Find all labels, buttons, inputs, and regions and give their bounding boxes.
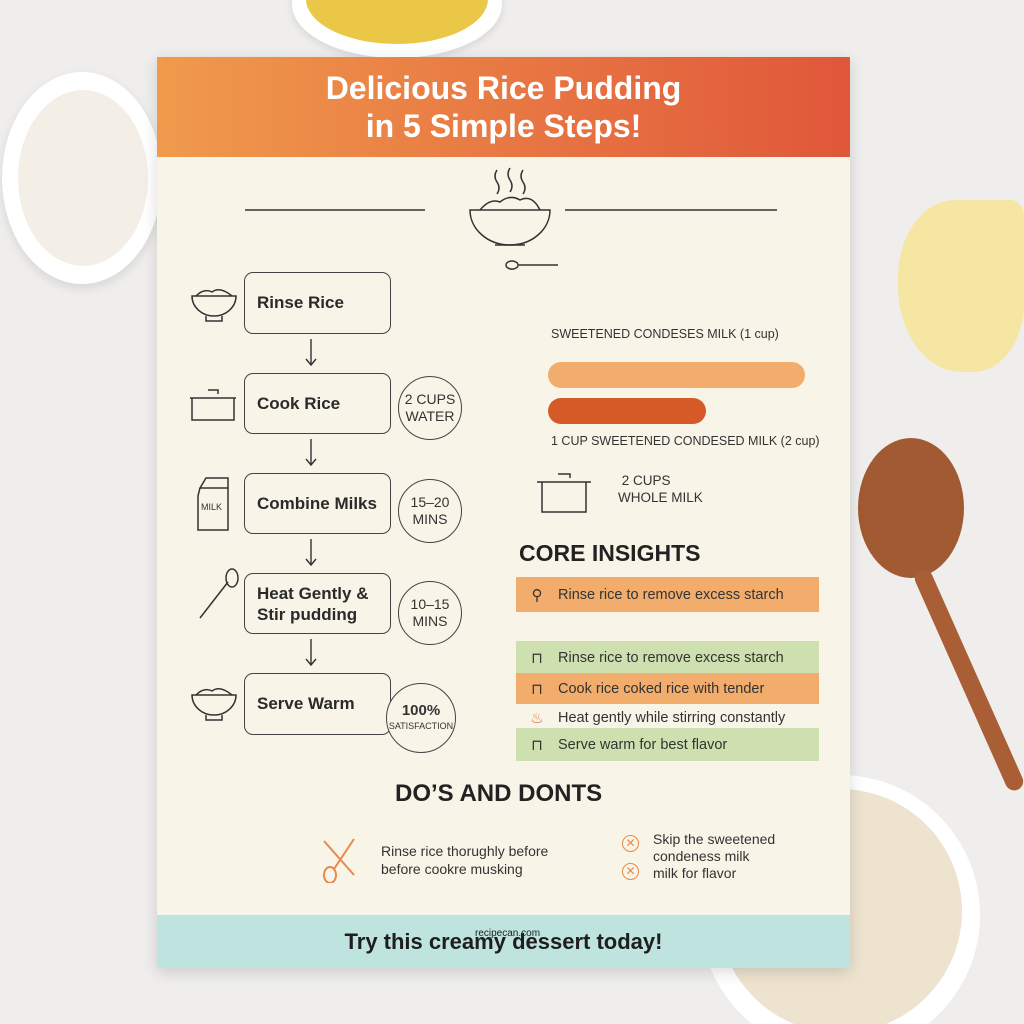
badge: 100% satisfaction: [386, 683, 456, 753]
insight rows: ⚲: [532, 586, 542, 604]
dont items: ✕: [625, 836, 636, 850]
step 5: Serve Warm: [244, 673, 391, 735]
circle: 10-15 mins: 10–15: [411, 596, 449, 612]
icon: pot whole milk: WHOLE MILK: [618, 490, 703, 505]
dont items: [622, 831, 775, 881]
left step icons: [190, 289, 239, 721]
header: in 5 Simple Steps!: [366, 108, 641, 144]
dont items: Skip the sweetened: [653, 831, 775, 847]
icon: top bowl with lines: [245, 168, 777, 270]
footer: [157, 915, 850, 968]
left step icons: MILK: [201, 502, 222, 512]
dont items: condeness milk: [653, 848, 750, 864]
step 4: Heat Gently: [244, 573, 391, 634]
text: Serve warm for best flavor: [558, 736, 727, 752]
circle: 15-20 mins: 15–20: [411, 494, 449, 510]
icon: pot whole milk: 2 CUPS: [622, 473, 671, 488]
arrow: [306, 339, 316, 366]
header: [157, 57, 850, 157]
text: ♨: [530, 710, 544, 727]
chart: milk bars: SWEETENED CONDESES MILK (1 cup): [551, 327, 779, 341]
footer: Try this creamy dessert today!: [345, 929, 662, 954]
background: rice bowl: [2, 72, 162, 284]
arrow: [306, 439, 316, 466]
circle: 10-15 mins: [398, 581, 462, 645]
circle: 15-20 mins: MINS: [412, 511, 448, 527]
footer: recipecan.com: [475, 928, 540, 939]
dont items: milk for flavor: [653, 865, 736, 881]
chart: milk bars: 1 CUP SWEETENED CONDESED MILK (2 cup): [551, 434, 820, 448]
insight rows: Rinse rice to remove excess starch: [558, 586, 784, 602]
badge: 100% satisfaction: 100%: [402, 702, 440, 718]
step 1: Rinse Rice: Rinse Rice: [257, 293, 344, 312]
text: ⊓: [531, 736, 543, 754]
step 5: Serve Warm: Serve Warm: [257, 694, 355, 713]
dont items: ✕: [625, 864, 636, 878]
badge: 100% satisfaction: SATISFACTION: [389, 720, 453, 730]
step 4: Heat Gently: Heat Gently &: [257, 584, 368, 602]
text: Cook rice coked rice with tender: [558, 680, 764, 696]
step 2: Cook Rice: [244, 373, 391, 434]
chart: milk bars: [548, 327, 820, 448]
step 1: Rinse Rice: [244, 272, 391, 334]
text: ⊓: [531, 650, 543, 666]
circle: 10-15 mins: MINS: [412, 613, 448, 629]
text: ⊓: [531, 680, 543, 698]
heading: dos and donts: DO’S AND DONTS: [395, 780, 602, 807]
circle: 2 cups water: [398, 376, 462, 440]
heading: core insights: CORE INSIGHTS: [519, 540, 700, 566]
insight rows: [516, 577, 819, 612]
arrow: [306, 639, 316, 666]
text: Heat gently while stirring constantly: [558, 710, 785, 726]
circle: 2 cups water: WATER: [405, 408, 454, 424]
icon: pot whole milk: [537, 473, 703, 513]
circle: 15-20 mins: [398, 479, 462, 543]
step 3: Combine Milks: [244, 473, 391, 534]
do item: Rinse rice thorughly before: [381, 843, 548, 859]
card: [157, 57, 850, 968]
text: Rinse rice to remove excess starch: [558, 650, 784, 666]
background: pudding bowl: [700, 775, 980, 1024]
header: Delicious Rice Pudding: [326, 70, 681, 106]
do item: [323, 838, 548, 883]
background: oil bowl: [292, 0, 502, 58]
arrow: [306, 539, 316, 566]
do item: before cookre musking: [381, 861, 523, 877]
step 3: Combine Milks: Combine Milks: [257, 494, 377, 512]
step 4: Heat Gently: Stir pudding: [257, 604, 357, 624]
circle: 2 cups water: 2 CUPS: [405, 391, 455, 407]
step 2: Cook Rice: Cook Rice: [257, 394, 340, 412]
background: butter blob: [898, 200, 1024, 372]
background: wooden spoon: [858, 438, 964, 578]
